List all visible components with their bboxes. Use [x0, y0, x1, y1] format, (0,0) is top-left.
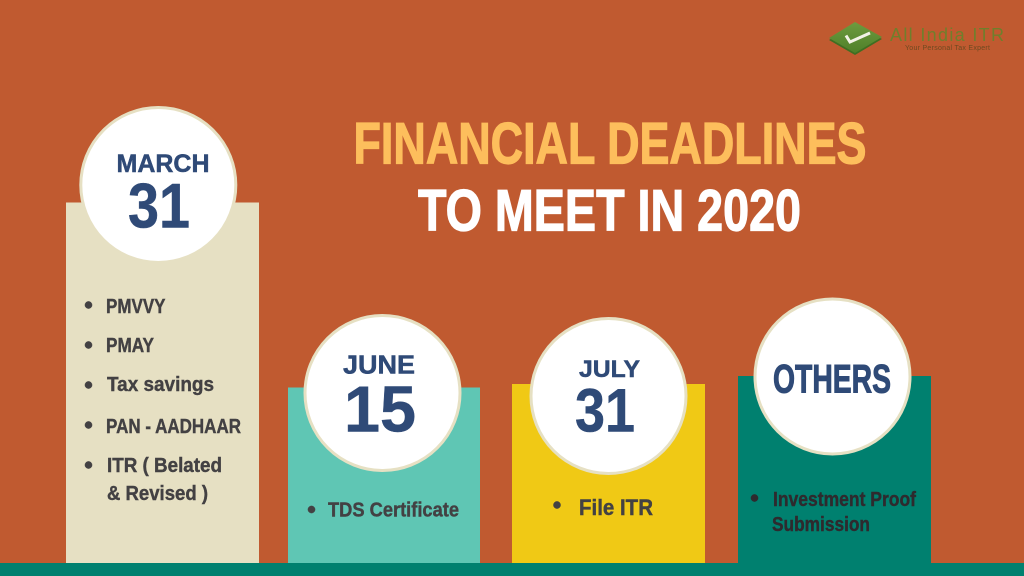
- item: ITR belated and revised: [85, 455, 222, 505]
- month: MARCH: [116, 150, 210, 178]
- icon: green diamond with check mark: [829, 22, 882, 55]
- panel: July 31: [512, 318, 705, 563]
- item: File ITR: File ITR: [579, 495, 653, 520]
- item: ITR belated and revised: ITR ( Belated: [107, 455, 222, 477]
- title line 2: TO MEET IN 2020: [418, 178, 801, 244]
- item: TDS Certificate: TDS Certificate: [328, 500, 459, 522]
- item: PMVVY: [85, 296, 166, 318]
- logo name: All India ITR: [890, 25, 1004, 45]
- panel background: [512, 384, 705, 563]
- item: PAN - AADHAAR: PAN - AADHAAR: [106, 416, 241, 438]
- month: JULY: [579, 356, 640, 383]
- label circle: [755, 299, 910, 454]
- month: JUNE: [343, 350, 415, 380]
- item: Investment Proof Submission: Investment Proof: [773, 489, 916, 511]
- date circle: [81, 108, 236, 262]
- logo: All India ITR: [829, 22, 1004, 55]
- panel: June 15: [288, 316, 480, 563]
- list of deadlines: [85, 296, 241, 505]
- title: [354, 112, 866, 244]
- item: ITR belated and revised: & Revised ): [107, 483, 208, 505]
- title line 1: FINANCIAL DEADLINES: [354, 112, 866, 176]
- date circle: [531, 318, 686, 474]
- day: 15: [344, 372, 416, 446]
- panel: March 31: [66, 108, 259, 563]
- day: 31: [128, 172, 190, 242]
- panel background: [738, 376, 931, 563]
- logo tagline: Your Personal Tax Expert: [905, 45, 990, 52]
- day: 31: [575, 376, 635, 444]
- item: Investment Proof Submission: [751, 489, 916, 536]
- heading: Others: OTHERS: [773, 358, 891, 402]
- panel: Others: [738, 299, 931, 563]
- panel background: [66, 202, 259, 563]
- item: PMAY: PMAY: [106, 335, 155, 357]
- date circle: [305, 316, 460, 470]
- bottom band: [0, 563, 1024, 576]
- item: PMVVY: PMVVY: [106, 296, 166, 318]
- item: PMAY: [85, 335, 155, 357]
- item: Tax savings: Tax savings: [107, 374, 214, 396]
- panel background: [288, 388, 480, 563]
- item: Investment Proof Submission: Submission: [772, 514, 870, 536]
